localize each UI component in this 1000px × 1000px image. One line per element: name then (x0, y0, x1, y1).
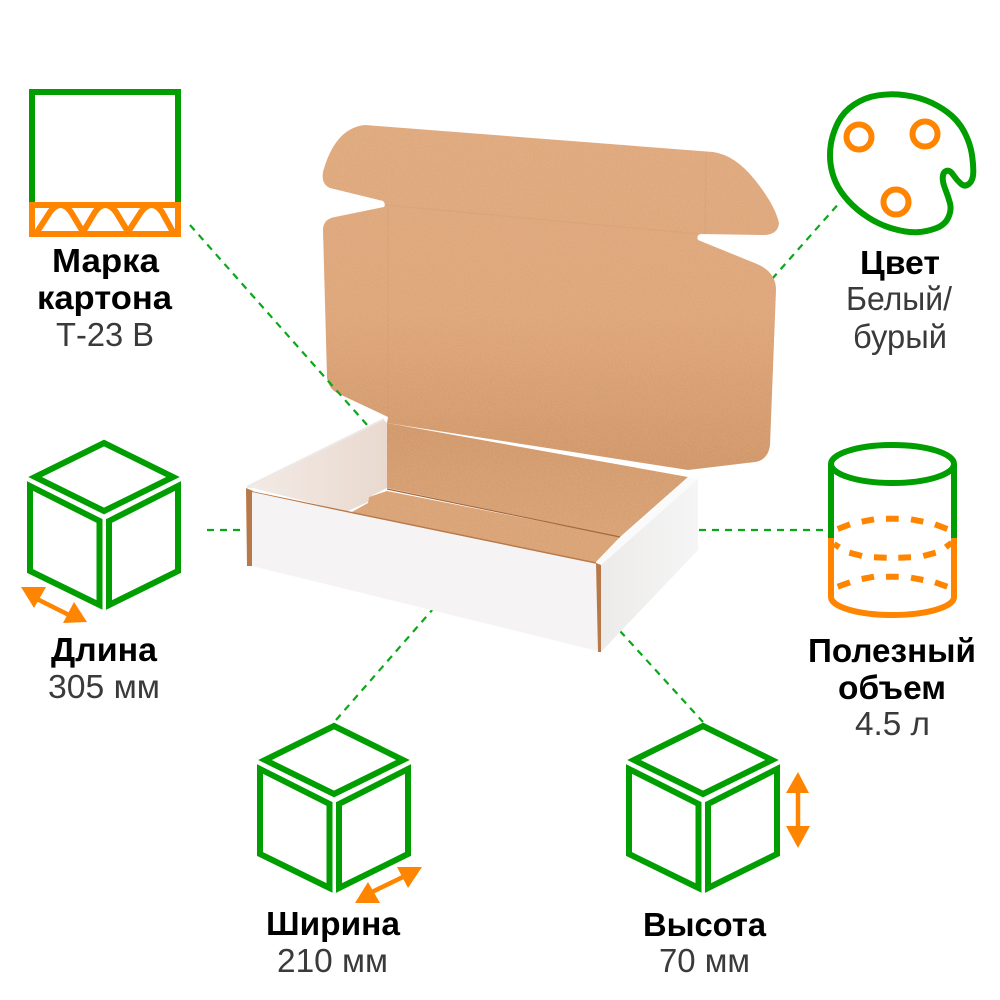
icon: width arrow (355, 867, 422, 903)
dashed connector: carton grade (190, 225, 368, 426)
left wall top lip (247, 419, 384, 487)
icon: cube (260, 726, 408, 888)
floor shadow line (387, 489, 620, 537)
value: 70 мм (659, 942, 750, 979)
dashed connector: colour (772, 201, 841, 279)
cardboard box photo illustration (246, 125, 779, 652)
value line 2: бурый (853, 318, 947, 355)
value: Белый/ (846, 280, 953, 317)
heading: Высота (643, 906, 767, 943)
value: 305 мм (48, 668, 160, 705)
inner left wall (246, 419, 387, 512)
right outer face (601, 479, 698, 652)
heading: Марка (52, 242, 160, 279)
right top lip (596, 477, 698, 565)
dashed connector: width (336, 609, 433, 720)
panel: usable volume (808, 445, 976, 742)
open lid with flap (323, 125, 779, 470)
box floor (350, 491, 620, 563)
front edge liner (252, 492, 596, 563)
icon: length arrow (21, 587, 87, 623)
heading line 2: объем (838, 669, 946, 706)
icon: height arrow (786, 772, 810, 848)
value: 210 мм (277, 942, 388, 979)
icon: cube (30, 443, 178, 605)
icon: cube (629, 726, 777, 888)
heading: Полезный (808, 632, 976, 669)
panel: length (21, 443, 178, 705)
value: Т-23 В (56, 316, 154, 353)
heading line 2: картона (37, 279, 173, 316)
left cut edge (246, 488, 253, 566)
panel: carton grade (32, 92, 178, 353)
panel: height (629, 726, 810, 979)
inner back wall (387, 423, 688, 537)
heading: Цвет (860, 244, 940, 281)
dashed connector: height (620, 631, 703, 722)
icon: corrugated board (32, 92, 178, 234)
heading: Длина (51, 631, 158, 668)
panel: colour (830, 94, 973, 355)
dashed connector: length (207, 529, 246, 531)
icon: palette (830, 94, 973, 232)
icon: cylinder (831, 445, 954, 615)
front face (252, 492, 598, 651)
heading: Ширина (266, 905, 401, 942)
panel: width (260, 726, 422, 979)
dashed connector: volume (699, 529, 827, 531)
value: 4.5 л (855, 705, 930, 742)
lid fold lines (385, 155, 706, 417)
front right cut edge (596, 563, 601, 652)
